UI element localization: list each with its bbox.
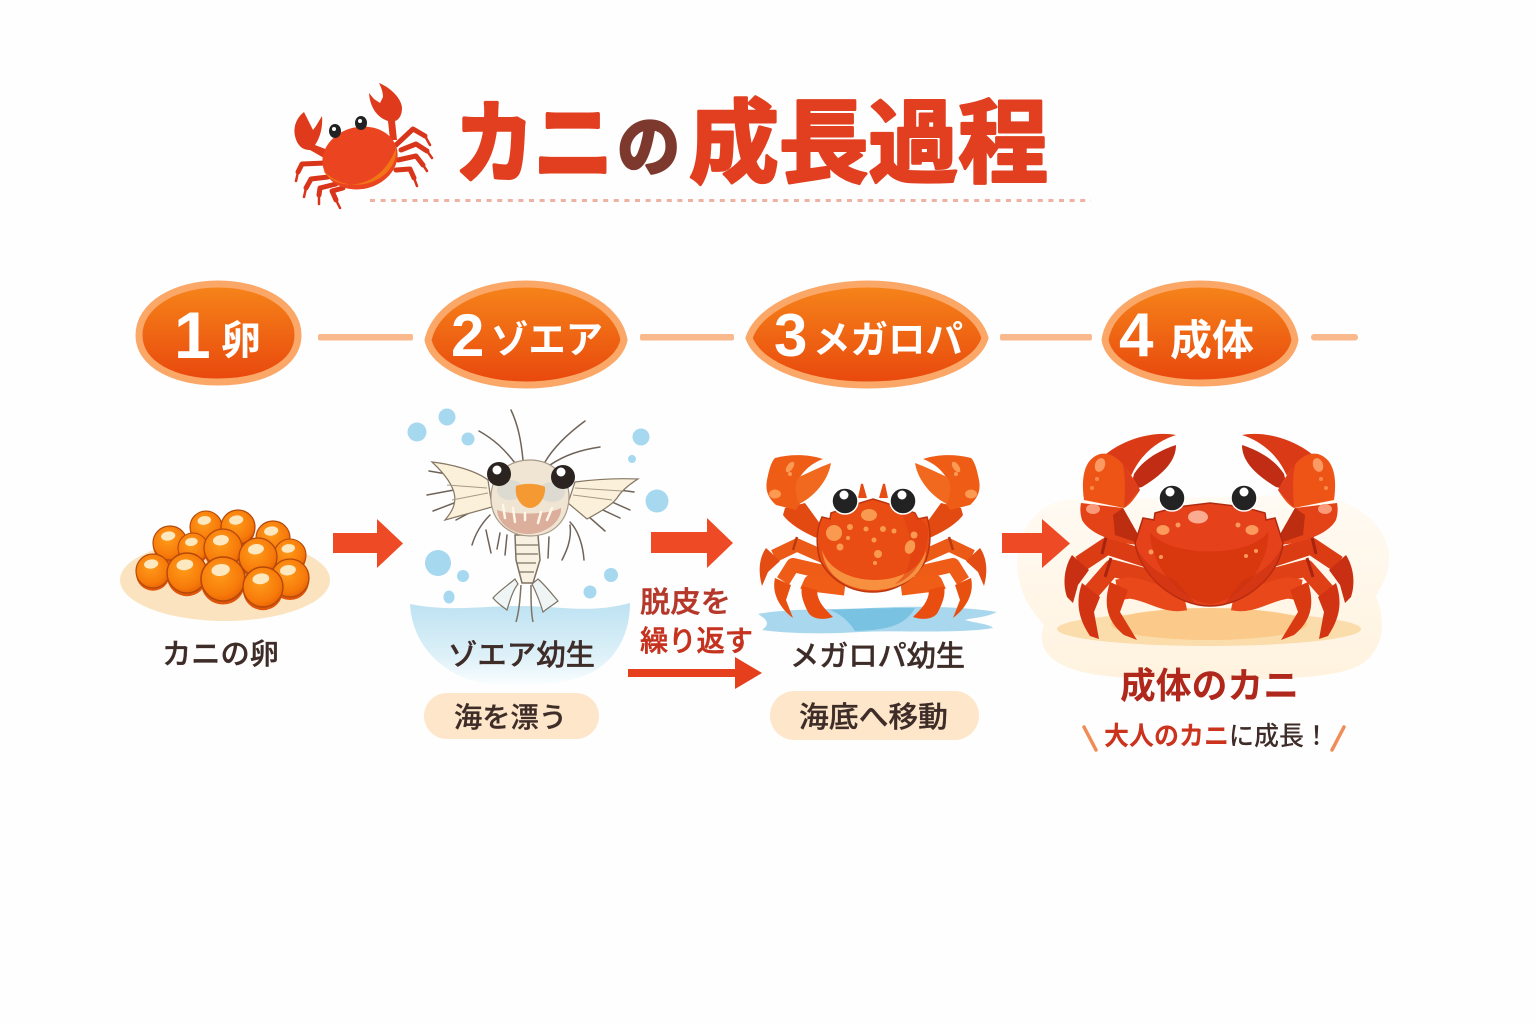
illustration: water bowl xyxy=(410,603,630,686)
step badge 4 xyxy=(1105,284,1295,383)
note pill: seabed xyxy=(770,691,979,740)
connectors xyxy=(318,334,1358,340)
title text: カニ xyxy=(455,95,613,195)
step badge 3: 3 xyxy=(774,302,807,369)
step badge 1: 1 xyxy=(174,298,211,372)
label: crab eggs: カニの卵 xyxy=(162,638,279,671)
title block xyxy=(294,83,1048,208)
label: adult crab: 成体のカニ xyxy=(1120,665,1299,706)
title text: 成長過程 xyxy=(689,94,1048,195)
step badge 4: 4 xyxy=(1119,301,1154,370)
note pill: drift xyxy=(424,693,599,739)
step badge 3: メガロパ xyxy=(813,320,963,362)
illustration: crab eggs xyxy=(120,510,330,621)
molting note: 繰り返す xyxy=(640,625,753,658)
step badge 2: ゾエア xyxy=(491,320,603,362)
note pill: seabed: 海底へ移動 xyxy=(799,701,948,734)
arrow 1 xyxy=(333,519,403,568)
glow behind adult crab xyxy=(1017,495,1389,680)
illustration: sand xyxy=(1057,608,1361,646)
illustration: megalopa crab xyxy=(760,455,986,619)
title text xyxy=(455,94,1048,195)
caption: grown up: 大人のカニに成長！ xyxy=(1104,721,1329,751)
arrow: molt long xyxy=(628,657,762,689)
title text: の xyxy=(617,110,680,184)
molting note: 脱皮を xyxy=(640,586,731,619)
illustration: adult crab xyxy=(1065,434,1353,640)
icon: title crab xyxy=(294,83,432,208)
step badge 3 xyxy=(749,284,985,385)
step badge 1 xyxy=(139,284,298,382)
step badge 4: 成体 xyxy=(1170,317,1254,364)
note pill: drift: 海を漂う xyxy=(454,702,567,733)
molting note xyxy=(640,586,753,658)
illustration: zoea larva xyxy=(427,410,638,622)
step badge 2 xyxy=(428,284,624,385)
arrow 3 xyxy=(1002,519,1070,568)
step badge 1: 卵 xyxy=(221,319,261,363)
label: zoea: ゾエア幼生 xyxy=(448,639,595,672)
illustration: bubbles xyxy=(408,408,668,604)
step badge 2: 2 xyxy=(451,302,484,369)
arrow 2 xyxy=(651,518,733,568)
label: megalopa: メガロパ幼生 xyxy=(790,640,965,673)
illustration: megalopa puddle xyxy=(758,607,997,633)
